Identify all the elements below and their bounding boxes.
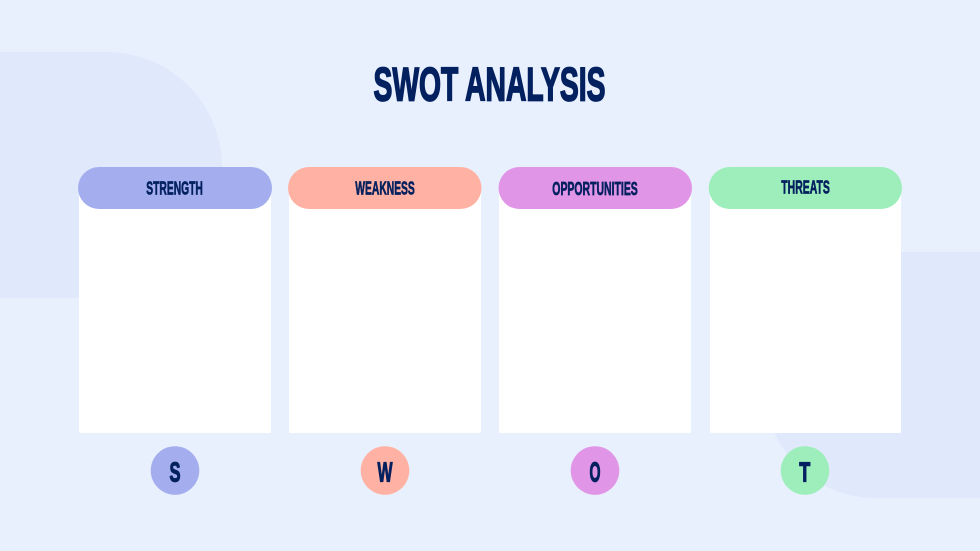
card: strength [79,188,271,433]
badge letter: W: W [378,456,393,488]
heading: threats: THREATS [781,176,830,198]
heading: strength: STRENGTH [146,178,203,198]
heading: weakness: WEAKNESS [355,178,415,198]
panel: weakness [288,167,482,495]
card: opportunities [499,188,691,433]
card: threats [710,188,901,433]
heading: opportunities: OPPORTUNITIES [552,178,638,199]
panel: strength [78,167,272,495]
panel: opportunities [498,167,692,495]
background shape: top left [0,52,222,298]
background shape: bottom right [765,252,980,498]
header pill: opportunities [498,167,692,209]
header pill: weakness [288,167,482,209]
panel: threats [709,167,902,495]
badge circle: W [361,446,409,495]
badge circle: O [571,446,619,495]
badge letter: S: S [170,456,180,488]
card: weakness [289,188,481,433]
header pill: threats [709,167,902,209]
title: SWOT ANALYSIS [374,58,606,110]
badge letter: T: T [799,456,810,488]
badge circle: T [781,446,829,495]
badge circle: S [151,446,199,495]
header pill: strength [78,167,272,209]
badge letter: O: O [590,456,600,488]
